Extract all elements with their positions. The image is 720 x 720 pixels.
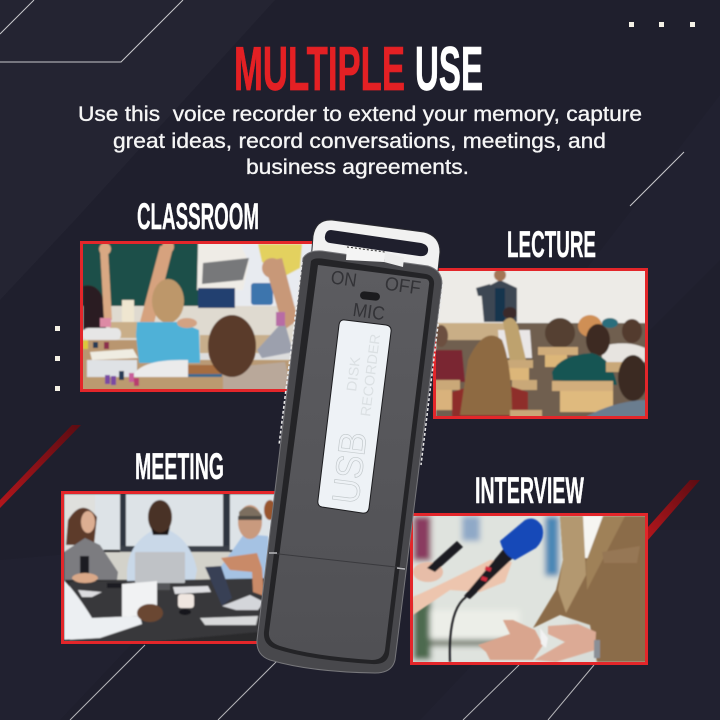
metal clip <box>311 220 440 280</box>
dots: top right <box>629 22 695 27</box>
mic hole <box>360 291 380 301</box>
white dashed side highlights <box>279 262 443 465</box>
left child <box>83 285 106 330</box>
mic cable <box>450 597 466 662</box>
decorative corner lines: top left <box>0 0 183 62</box>
desks <box>432 380 460 390</box>
label: interview: INTERVIEW <box>475 470 584 511</box>
intro text: great ideas, record conversations, meetings, and <box>113 129 606 153</box>
red diagonal stripe: left <box>0 425 81 508</box>
lecturer <box>481 280 517 322</box>
red diagonal stripe: right <box>648 480 700 540</box>
left plaid student <box>434 325 448 347</box>
hands and arm <box>221 553 264 596</box>
left woman <box>66 508 97 545</box>
back row students <box>503 307 517 319</box>
mic windscreen <box>500 518 543 560</box>
label: meeting: MEETING <box>135 446 224 487</box>
decorative lines: bottom <box>70 645 594 720</box>
man center <box>127 527 197 585</box>
label text: USB: USB <box>325 430 376 506</box>
white label <box>318 320 391 513</box>
photo panel: interview <box>410 514 648 664</box>
device: USB voice recorder <box>257 220 443 673</box>
mic handle <box>464 546 515 599</box>
photo panel: meeting <box>62 492 285 642</box>
center child <box>140 244 174 327</box>
reporter arms <box>413 560 512 615</box>
label: classroom: CLASSROOM <box>137 196 259 237</box>
jacket <box>533 516 648 662</box>
title: USE <box>415 35 483 104</box>
switch labels: ON <box>329 267 358 292</box>
chair and books <box>132 360 188 377</box>
switch labels <box>329 267 422 325</box>
label text: disk recorder <box>343 333 383 417</box>
label text: disk recorder: RECORDER <box>357 333 383 417</box>
blurred street background <box>410 514 570 664</box>
intro text: business agreements. <box>246 155 469 179</box>
switch labels: OFF <box>383 274 422 299</box>
intro text <box>78 102 642 179</box>
teal shirt student <box>586 324 610 356</box>
right foreground student <box>587 400 648 418</box>
switch labels: MIC <box>351 300 386 325</box>
white chair and paper <box>83 328 121 340</box>
chalkboard and wall <box>83 244 199 307</box>
intro text: Use this voice recorder to extend your memory, capture <box>78 102 642 126</box>
papers <box>122 581 157 617</box>
label text: disk recorder: DISK <box>343 355 363 392</box>
decorative line: right of text <box>630 152 684 206</box>
window and wall <box>64 494 96 553</box>
man right <box>220 534 268 580</box>
phone <box>427 541 463 572</box>
label: lecture: LECTURE <box>507 224 596 265</box>
inner dark rim <box>264 258 434 664</box>
long-hair student <box>452 386 528 416</box>
table <box>70 578 280 642</box>
body outer shell <box>257 251 442 673</box>
hands of interviewee <box>478 620 543 660</box>
far desks <box>83 304 296 348</box>
photo panel: lecture <box>430 268 648 419</box>
body front face <box>269 265 429 660</box>
foreground person <box>64 580 142 640</box>
laptop <box>135 552 185 583</box>
side notches <box>269 553 405 569</box>
right child <box>268 258 296 328</box>
clip tab <box>346 247 404 267</box>
teacher <box>197 244 249 290</box>
dots: left <box>55 326 60 391</box>
photo panel: classroom <box>80 240 323 392</box>
title: MULTIPLE <box>234 35 405 104</box>
seam line <box>270 553 405 568</box>
